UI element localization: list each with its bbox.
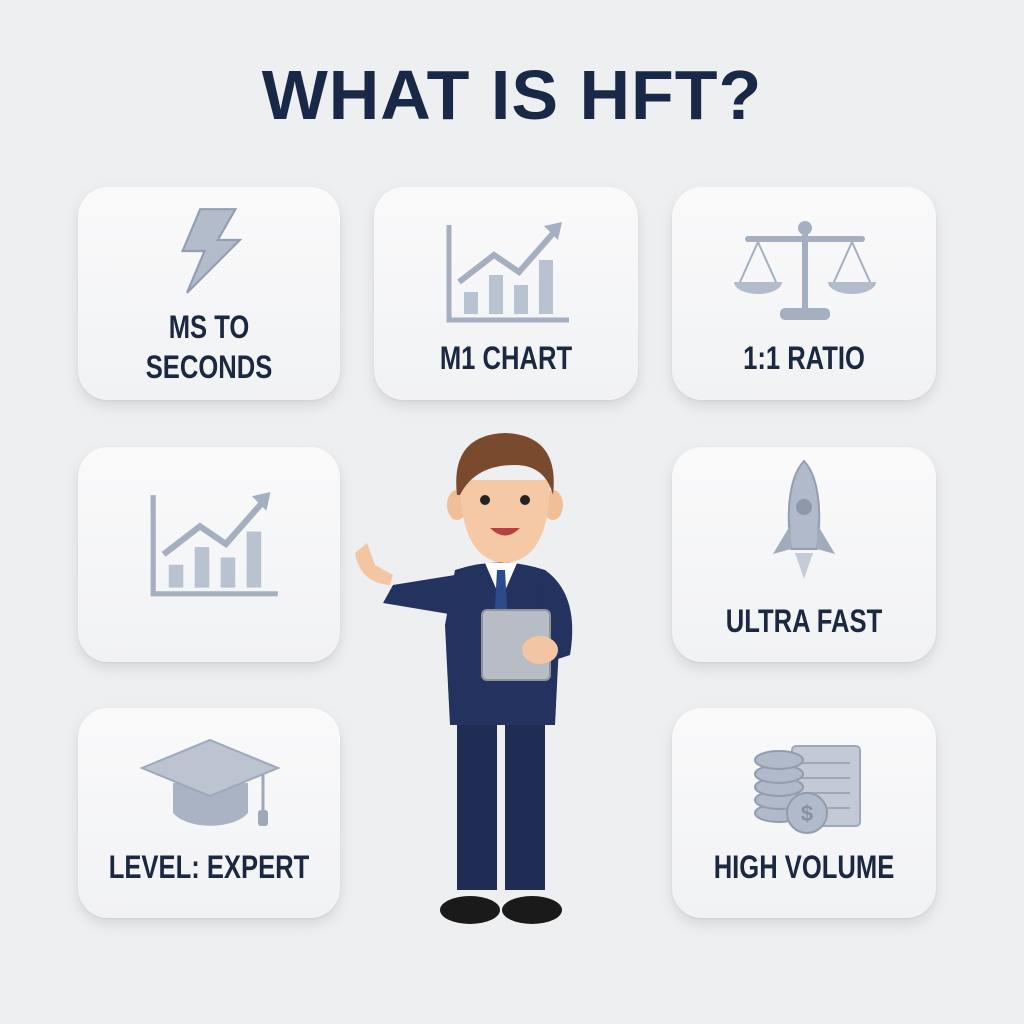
panel: m1 chart [374,187,638,400]
arm right [540,570,572,665]
body [445,562,560,725]
label: LEVEL: EXPERT [109,849,309,885]
tablet [482,610,550,680]
icon: coins [754,745,861,834]
label: ULTRA FAST [726,603,882,639]
label [146,309,272,385]
arm raised [383,575,455,615]
icon: lightning [181,208,242,294]
label: HIGH VOLUME [714,849,894,885]
shoes [440,896,500,924]
head [447,490,467,520]
panel: 1:1 ratio [672,187,936,400]
label: 1:1 RATIO [743,340,865,376]
label: SECONDS [146,349,272,385]
label: MS TO [169,309,249,345]
icon: coins: $ [801,801,813,826]
title: WHAT IS HFT? [262,56,762,134]
panel: ultra fast [672,447,936,662]
panel: chart [78,447,340,662]
icon: graduation cap [140,739,280,826]
legs [457,715,497,890]
icon: scale [734,221,876,320]
icon: chart [150,492,278,596]
character: businessman [355,433,572,924]
panel: level expert [78,708,340,918]
panel: ms to seconds [78,187,340,400]
icon: chart [446,222,569,322]
panel: high volume [672,708,936,918]
icon: rocket [773,460,835,579]
label: M1 CHART [440,340,572,376]
